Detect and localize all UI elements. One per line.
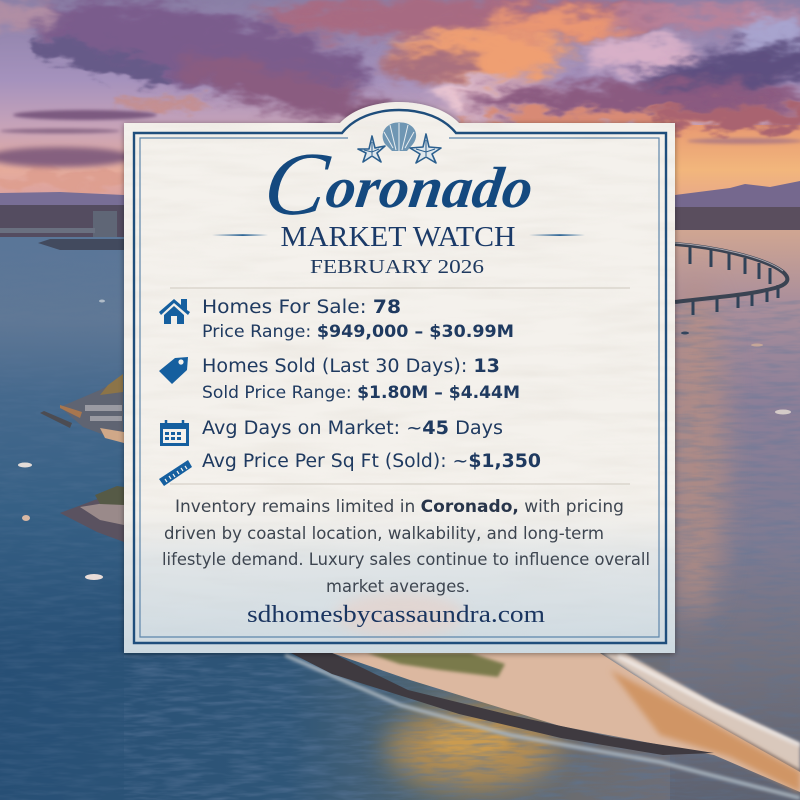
text block: market summary: market averages. xyxy=(326,577,470,596)
text: homes for sale count: Homes For Sale: 78 xyxy=(202,297,401,318)
panel: paper card xyxy=(124,100,676,655)
title: Coronado: C xyxy=(258,133,336,234)
text: price per sq ft: Avg Price Per Sq Ft (Sold): ~ $1,350 xyxy=(202,451,541,472)
stat: avg price per square foot xyxy=(159,451,541,486)
text: sold price range: Sold Price Range: $1.80M – $4.44M xyxy=(202,383,520,403)
text block: market summary: lifestyle demand. Luxury sales continue to influence overall xyxy=(162,550,650,569)
text block: market summary: driven by coastal location, walkability, and long-term xyxy=(164,524,604,543)
heading: Market Watch: MARKET WATCH xyxy=(280,222,516,253)
bridge xyxy=(675,243,787,315)
title: Coronado: oronado xyxy=(322,155,537,220)
text: homes sold count: Homes Sold (Last 30 Days): 13 xyxy=(202,356,500,377)
background: ocean xyxy=(0,230,800,800)
icon: calendar xyxy=(160,420,189,446)
stat: homes for sale xyxy=(159,297,514,342)
text: price range: Price Range: $949,000 – $30.99M xyxy=(202,322,514,342)
marina on left shore xyxy=(18,300,791,580)
text block: market summary: Inventory remains limited in Coronado, with pricing xyxy=(175,497,624,516)
background: sunset sky xyxy=(0,0,800,200)
icon: seashell and starfish xyxy=(358,122,441,163)
icon: ruler xyxy=(159,460,192,486)
heading: date: FEBRUARY 2026 xyxy=(310,256,484,278)
text block: market summary xyxy=(162,497,650,596)
stat: avg days on market xyxy=(160,418,503,446)
stat: homes sold xyxy=(159,356,520,403)
website url: sdhomesbycassaundra.com xyxy=(247,602,545,628)
text: days on market: Avg Days on Market: ~ 45 Days xyxy=(202,418,503,439)
background: distant shoreline and city xyxy=(0,181,800,237)
icon: price tag xyxy=(159,357,188,384)
icon: house xyxy=(159,299,190,324)
beach, surf and breakwater xyxy=(285,653,800,798)
